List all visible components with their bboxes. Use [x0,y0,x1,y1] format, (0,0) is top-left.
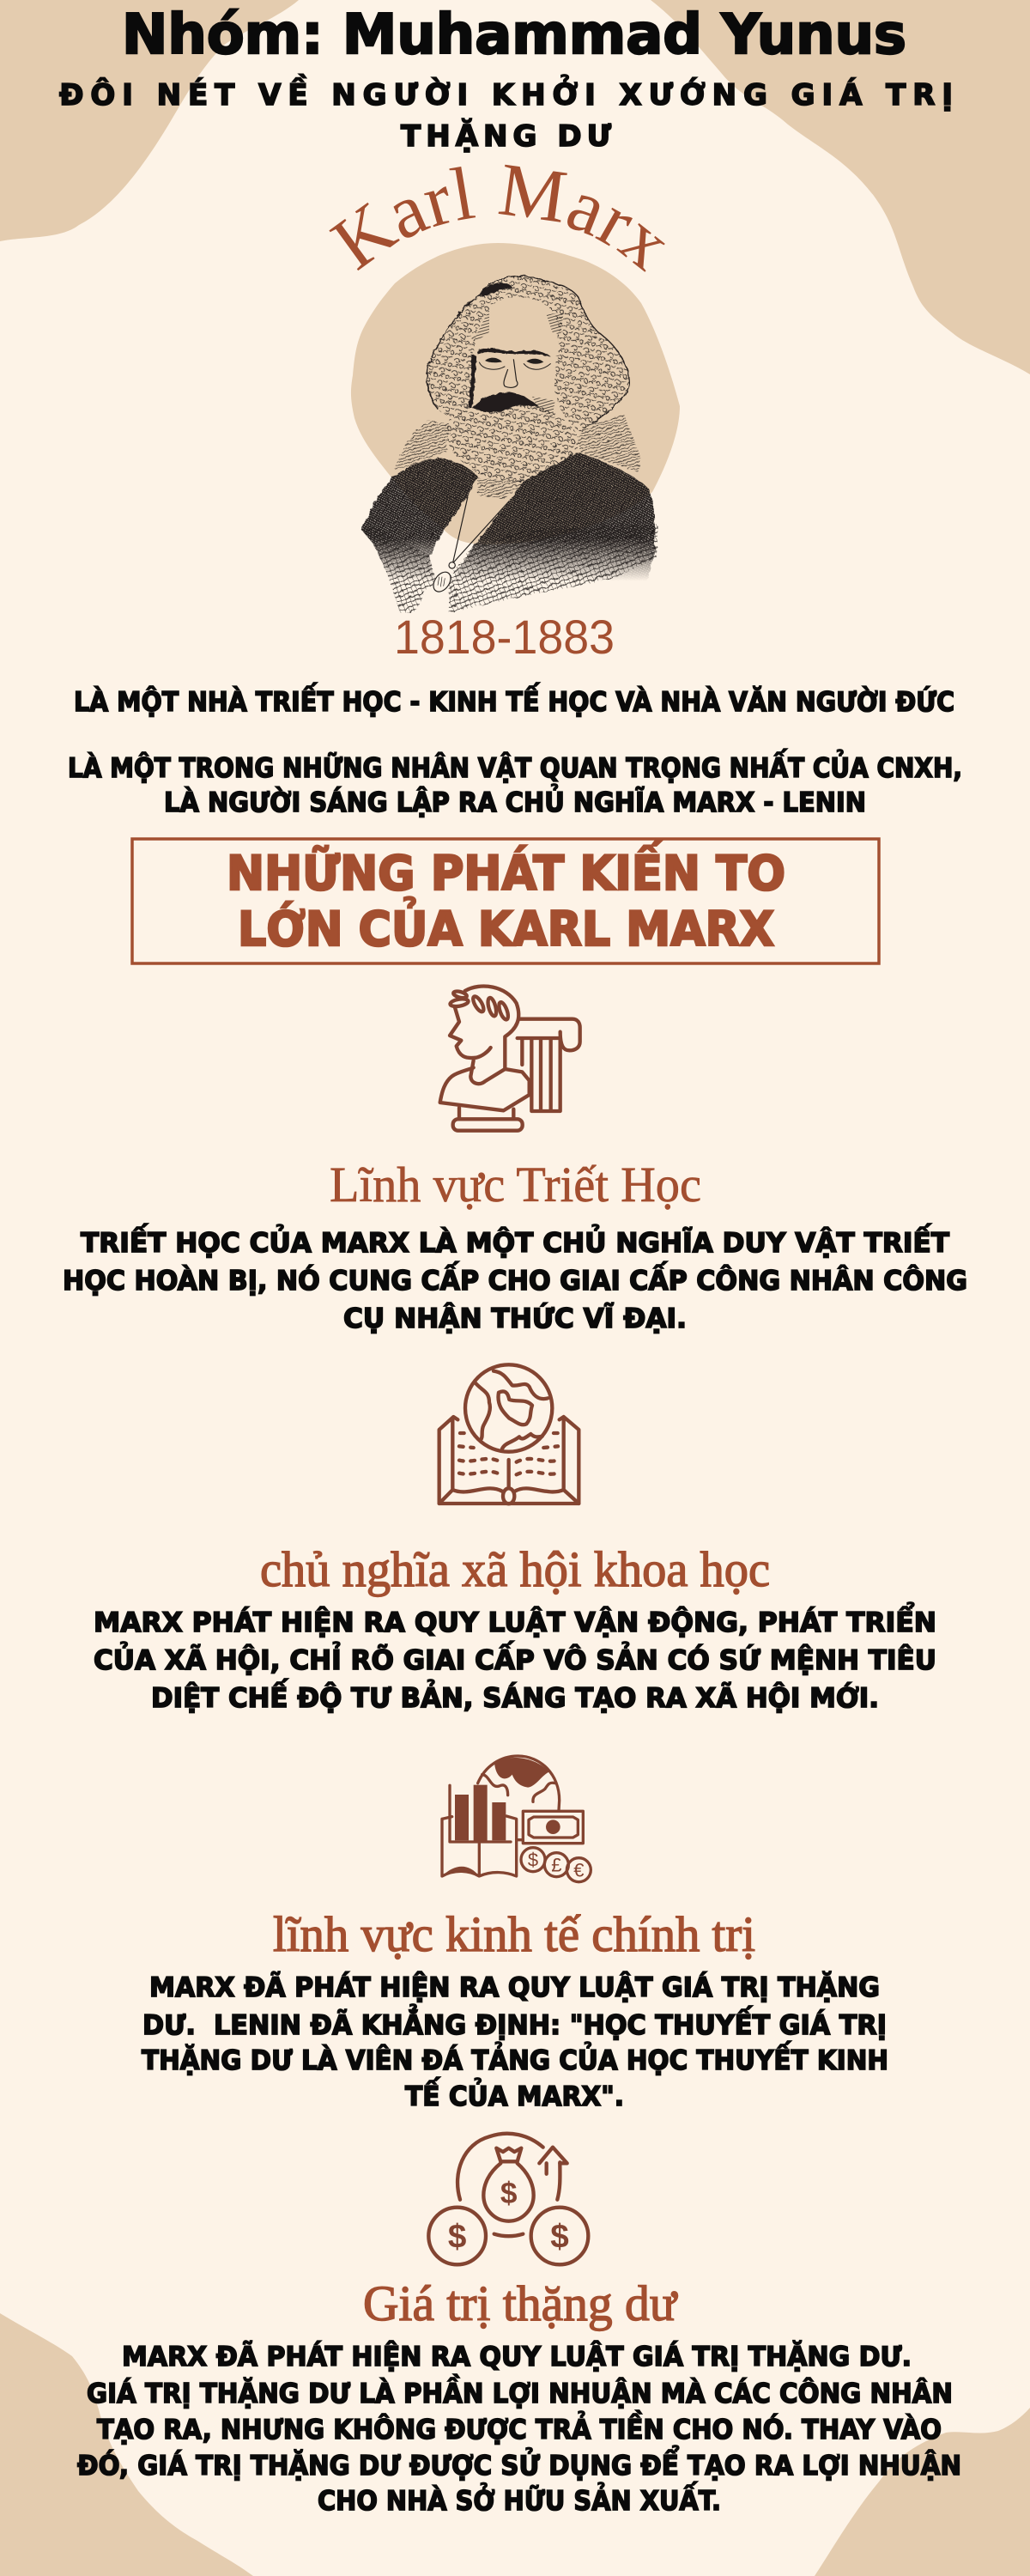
background blob: top right [651,0,1030,374]
body: philosophy: TRIẾT HỌC CỦA MARX LÀ MỘT CHỦ NGHĨA DUY VẬT TRIẾT [81,1223,950,1259]
heading: philosophy: Lĩnh vực Triết Học [330,1157,701,1212]
icon: globe on open book [439,1364,579,1504]
body: political economy: MARX ĐÃ PHÁT HIỆN RA QUY LUẬT GIÁ TRỊ THẶNG [149,1971,880,2003]
body: scientific socialism: CỦA XÃ HỘI, CHỈ RÕ GIAI CẤP VÔ SẢN CÓ SỨ MỆNH TIÊU [94,1640,936,1676]
heading box [132,839,879,963]
portrait: engraving of Karl Marx [361,276,658,612]
coat upper, dense crosshatch [360,453,656,580]
dark side of face [469,355,476,408]
dates: 1818-1883 [394,610,615,664]
nose [504,359,518,387]
eyes [479,358,551,369]
body: political economy: TẾ CỦA MARX". [405,2076,624,2112]
body: philosophy [63,1223,967,1334]
heading: scientific socialism: chủ nghĩa xã hội khoa học [260,1541,770,1597]
moustache [472,392,539,412]
body: political economy [142,1971,888,2112]
subtitle: THẶNG DƯ [401,118,612,154]
heading box: LỚN CỦA KARL MARX [238,896,774,957]
coat lower hatching [362,524,658,612]
eyebrows [476,348,551,356]
subtitle [59,74,953,154]
icon: money bag and coins: $ [448,2218,466,2255]
icon: globe, chart, book and money [442,1756,591,1882]
hair [427,276,629,432]
background blob: bottom right [815,2408,1030,2576]
background blob: top left [0,0,299,241]
icon: money bag and coins: $ [500,2177,518,2210]
heading: political economy: lĩnh vực kinh tế chính trị [273,1906,755,1962]
background blob: bottom left [0,2313,253,2576]
body: political economy: THẶNG DƯ LÀ VIÊN ĐÁ TẢNG CỦA HỌC THUYẾT KINH [142,2040,888,2076]
body: scientific socialism [94,1601,936,1714]
body: surplus value: GIÁ TRỊ THẶNG DƯ LÀ PHẦN LỢI NHUẬN MÀ CÁC CÔNG NHÂN [87,2373,953,2409]
body: political economy: DƯ. LENIN ĐÃ KHẲNG ĐỊNH: "HỌC THUYẾT GIÁ TRỊ [142,2003,887,2041]
intro text: LÀ MỘT NHÀ TRIẾT HỌC - KINH TẾ HỌC VÀ NHÀ VĂN NGƯỜI ĐỨC [74,682,954,718]
body: surplus value: TẠO RA, NHƯNG KHÔNG ĐƯỢC TRẢ TIỀN CHO NÓ. THAY VÀO [97,2409,942,2445]
body: surplus value: CHO NHÀ SỞ HỮU SẢN XUẤT. [318,2481,721,2517]
body: philosophy: HỌC HOÀN BỊ, NÓ CUNG CẤP CHO GIAI CẤP CÔNG NHÂN CÔNG [63,1261,967,1297]
portrait blob [351,243,680,544]
body: surplus value [77,2340,961,2517]
body: scientific socialism: MARX PHÁT HIỆN RA QUY LUẬT VẬN ĐỘNG, PHÁT TRIỂN [94,1601,936,1638]
subtitle: ĐÔI NÉT VỀ NGƯỜI KHỞI XƯỚNG GIÁ TRỊ [59,74,953,112]
collar hatching [395,414,641,500]
title: Nhóm: Muhammad Yunus [122,3,906,67]
heading: surplus value: Giá trị thặng dư [363,2275,678,2331]
icon: money bag and coins [428,2134,588,2264]
body: surplus value: MARX ĐÃ PHÁT HIỆN RA QUY LUẬT GIÁ TRỊ THẶNG DƯ. [122,2340,912,2372]
body: surplus value: ĐÓ, GIÁ TRỊ THẶNG DƯ ĐƯỢC SỬ DỤNG ĐỂ TẠO RA LỢI NHUẬN [77,2445,961,2482]
intro text [68,682,962,818]
body: scientific socialism: DIỆT CHẾ ĐỘ TƯ BẢN, SÁNG TẠO RA XÃ HỘI MỚI. [151,1678,879,1714]
chain and pendant [430,496,509,595]
body: philosophy: CỤ NHẬN THỨC VĨ ĐẠI. [343,1301,687,1334]
curved name: Karl Marx: Karl Marx [330,165,665,272]
intro text: LÀ NGƯỜI SÁNG LẬP RA CHỦ NGHĨA MARX - LENIN [164,782,866,818]
forehead hatching [474,309,564,341]
icon: globe, chart, book and money: £ [551,1854,561,1875]
icon: globe, chart, book and money: € [573,1859,584,1880]
heading box: NHỮNG PHÁT KIẾN TO [227,839,785,901]
icon: philosopher bust and column [440,987,580,1131]
icon: globe, chart, book and money: $ [528,1849,538,1870]
beard [446,404,579,483]
icon: money bag and coins: $ [550,2218,569,2255]
